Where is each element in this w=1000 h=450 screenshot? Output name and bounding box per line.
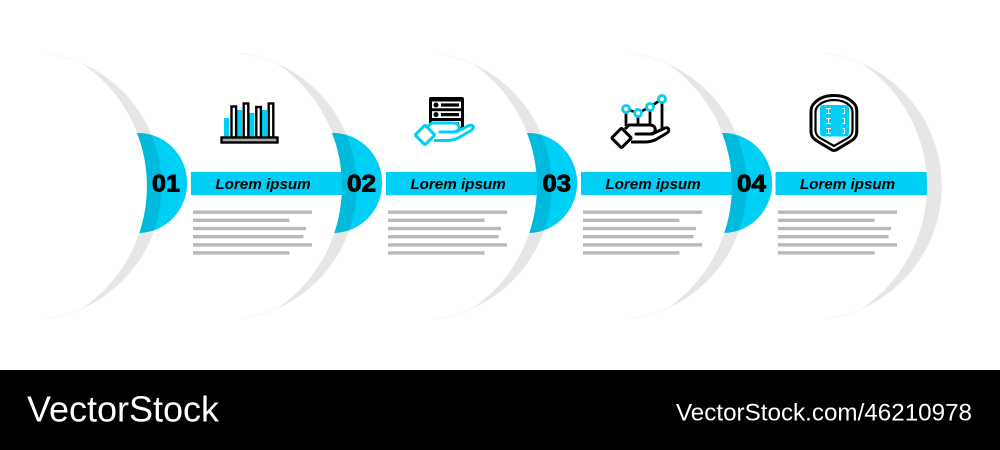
crescent: step 4 circle edge: [825, 53, 942, 319]
logo wordmark: VectorStock: [27, 388, 220, 430]
icon: bar chart: [222, 104, 278, 142]
panel: step 2: [240, 53, 537, 319]
icon: growth graph on hand: [612, 96, 669, 148]
semicircle: step 3 marker: [527, 133, 577, 233]
semicircle: step 4 marker: [722, 133, 772, 233]
label bar 4: Lorem ipsum: [800, 176, 895, 193]
text lines 3: [583, 210, 702, 255]
panel: step 1: [45, 53, 342, 319]
text lines 4: [778, 210, 897, 255]
label bar 2: Lorem ipsum: [410, 176, 506, 193]
label bar 1: [191, 172, 342, 195]
icon: server on hand: [415, 97, 473, 145]
crescent: step 1 circle edge: [240, 53, 357, 319]
label bar 1: Lorem ipsum: [215, 176, 311, 193]
panel: step 3: [435, 53, 732, 319]
text lines 1: [193, 210, 312, 255]
number 02: 02: [347, 170, 376, 198]
label bar 3: [581, 172, 732, 195]
label bar 4: [776, 172, 927, 195]
number 01: 01: [152, 170, 180, 198]
number 04: 04: [737, 170, 767, 198]
label bar 3: Lorem ipsum: [605, 176, 701, 193]
crescent: left circle edge: [45, 53, 162, 319]
icon: shield with server: [811, 96, 857, 150]
crescent: step 2 circle edge: [435, 53, 552, 319]
footer banner: [0, 370, 1000, 450]
panel: step 4: [630, 53, 942, 319]
crescent: step 3 circle edge: [630, 53, 747, 319]
text lines 2: [388, 210, 507, 255]
image id url: VectorStock.com/46210978: [676, 400, 972, 426]
number 03: 03: [542, 170, 571, 198]
semicircle: step 1 marker: [137, 133, 187, 233]
semicircle: step 2 marker: [332, 133, 382, 233]
label bar 2: [386, 172, 537, 195]
